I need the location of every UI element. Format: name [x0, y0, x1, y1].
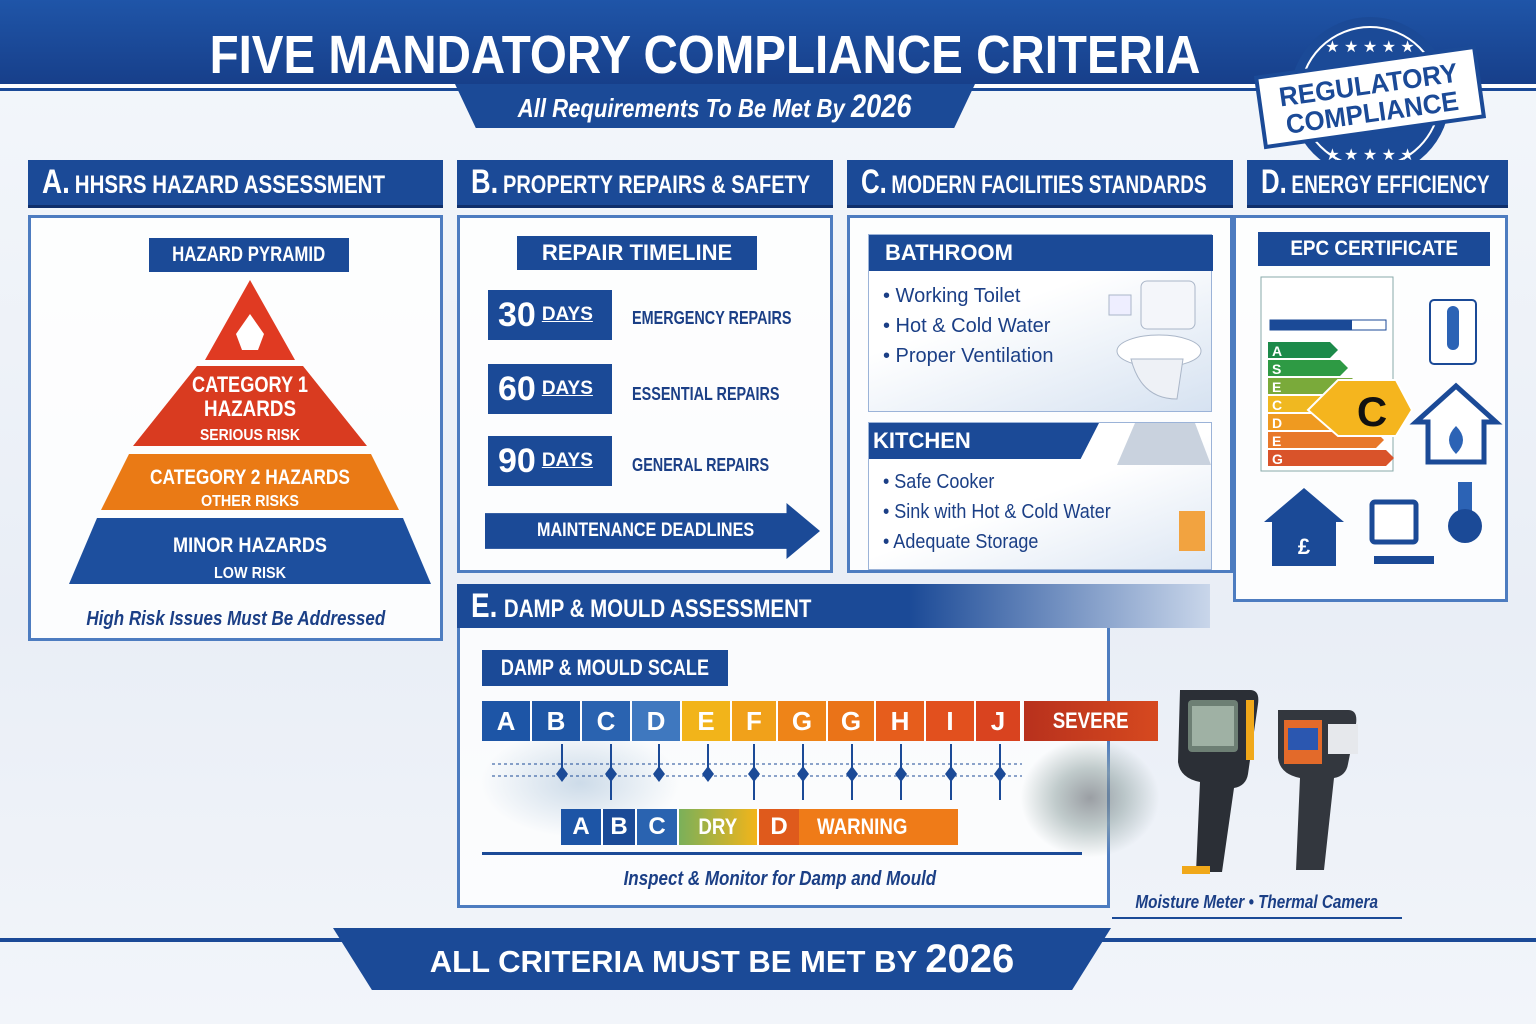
secondary scale: dry / warning: C [648, 813, 666, 840]
bottom banner: ALL CRITERIA MUST BE MET BY 2026 [430, 936, 1014, 980]
arrow: maintenance deadlines [485, 503, 820, 559]
timeline items: 30 [498, 296, 536, 334]
EPC chart: A [1272, 343, 1282, 359]
secondary scale: dry / warning: WARNING [817, 814, 907, 839]
panel A [28, 215, 443, 641]
timeline items [488, 290, 792, 486]
EPC chart: S [1272, 361, 1281, 377]
mould spots [1020, 738, 1160, 858]
panel C [847, 215, 1233, 573]
scale bar: H [891, 706, 909, 736]
timeline items: EMERGENCY REPAIRS [632, 308, 792, 328]
secondary scale: dry / warning: B [610, 813, 628, 840]
pyramid: HAZARDS [204, 396, 296, 421]
bathroom card [868, 234, 1212, 412]
timeline items: 60 [498, 370, 536, 408]
panel D [1233, 215, 1508, 602]
scale bar: D [647, 706, 665, 736]
badge: regulatory compliance: ★ ★ ★ ★ ★ [1325, 39, 1415, 56]
timeline items: DAYS [542, 304, 593, 325]
tag: repair timeline: REPAIR TIMELINE [542, 240, 732, 265]
kitchen card [868, 422, 1212, 570]
tag: hazard pyramid [149, 238, 349, 272]
pyramid [69, 280, 431, 584]
EPC chart: E [1272, 433, 1281, 449]
icon: moisture meter and thermal camera [1178, 690, 1358, 874]
secondary scale: dry / warning: A [572, 813, 590, 840]
caption A: High Risk Issues Must Be Addressed [86, 608, 385, 630]
scale bar: G [792, 706, 812, 736]
kitchen card: KITCHEN [873, 428, 971, 453]
header D: D.ENERGY EFFICIENCY [1261, 163, 1490, 201]
scale bar: SEVERE [1053, 708, 1129, 733]
header A [28, 160, 443, 208]
header B: B.PROPERTY REPAIRS & SAFETY [471, 163, 810, 201]
tag: EPC certificate: EPC CERTIFICATE [1290, 237, 1458, 260]
scale bar: B [547, 706, 565, 736]
bottom line [0, 938, 1536, 942]
bathroom card: • Hot & Cold Water [883, 315, 1050, 337]
timeline items: DAYS [542, 378, 593, 399]
tag: damp & mould scale [482, 650, 728, 686]
secondary scale: dry / warning: D [770, 813, 788, 840]
tag: hazard pyramid: HAZARD PYRAMID [172, 243, 326, 266]
badge: regulatory compliance: ★ ★ ★ ★ ★ [1325, 147, 1415, 164]
kitchen card: • Adequate Storage [883, 531, 1038, 553]
bathroom card: • Working Toilet [883, 285, 1020, 307]
bathroom card: BATHROOM [885, 240, 1013, 265]
header E: E. DAMP & MOULD ASSESSMENT [471, 586, 811, 624]
tag: EPC certificate [1258, 232, 1490, 266]
panel B [457, 215, 833, 573]
header E [457, 584, 1210, 628]
scale bar: C [597, 706, 615, 736]
pyramid: SERIOUS RISK [200, 427, 300, 444]
badge: regulatory compliance [1254, 17, 1486, 164]
timeline items: ESSENTIAL REPAIRS [632, 384, 780, 404]
badge: regulatory compliance: COMPLIANCE [1284, 86, 1460, 140]
header A: A.HHSRS HAZARD ASSESSMENT [42, 163, 385, 201]
arrow markers [492, 744, 1022, 800]
stain effect [480, 728, 680, 838]
EPC chart: D [1272, 415, 1282, 431]
timeline items: GENERAL REPAIRS [632, 455, 769, 475]
scale bar: E [697, 706, 715, 736]
panel E [457, 628, 1110, 908]
timeline items: 90 [498, 442, 536, 480]
secondary scale: dry / warning [561, 809, 958, 845]
EPC chart: £ [1298, 534, 1311, 559]
subtitle ribbon [455, 84, 975, 128]
scale bar: F [746, 706, 762, 736]
pyramid: LOW RISK [214, 565, 286, 582]
caption E: Inspect & Monitor for Damp and Mould [624, 868, 936, 890]
EPC chart: G [1272, 451, 1283, 467]
EPC chart: E [1272, 379, 1281, 395]
tag: damp & mould scale: DAMP & MOULD SCALE [501, 655, 709, 680]
scale bar [482, 701, 1158, 741]
EPC chart: C [1357, 388, 1387, 435]
pyramid: OTHER RISKS [201, 493, 299, 510]
caption: instruments: Moisture Meter • Thermal Camera [1136, 892, 1378, 912]
scale bar: A [497, 706, 515, 736]
top banner [0, 0, 1536, 88]
scale bar: G [841, 706, 861, 736]
kitchen card: • Safe Cooker [883, 471, 994, 493]
icon: toilet [1108, 280, 1202, 400]
subtitle ribbon: All Requirements To Be Met By 2026 [518, 88, 912, 124]
scale bar: J [991, 706, 1005, 736]
kitchen card: • Sink with Hot & Cold Water [883, 501, 1111, 523]
header C: C.MODERN FACILITIES STANDARDS [861, 163, 1207, 201]
bottom banner [333, 928, 1111, 990]
scale bar: I [946, 706, 954, 736]
pyramid: CATEGORY 2 HAZARDS [150, 466, 350, 489]
EPC chart [1260, 276, 1502, 566]
caption: instruments [1112, 892, 1402, 919]
header D [1247, 160, 1508, 208]
timeline items: DAYS [542, 450, 593, 471]
secondary scale: dry / warning: DRY [699, 814, 737, 839]
EPC chart: C [1272, 397, 1282, 413]
bathroom card: • Proper Ventilation [883, 345, 1053, 367]
title: FIVE MANDATORY COMPLIANCE CRITERIA [210, 25, 1200, 85]
tag: repair timeline [517, 236, 757, 270]
arrow: maintenance deadlines: MAINTENANCE DEADLINES [537, 520, 754, 541]
pyramid: CATEGORY 1 [192, 372, 308, 397]
pyramid: MINOR HAZARDS [173, 534, 327, 557]
badge: regulatory compliance: REGULATORY [1277, 58, 1460, 112]
